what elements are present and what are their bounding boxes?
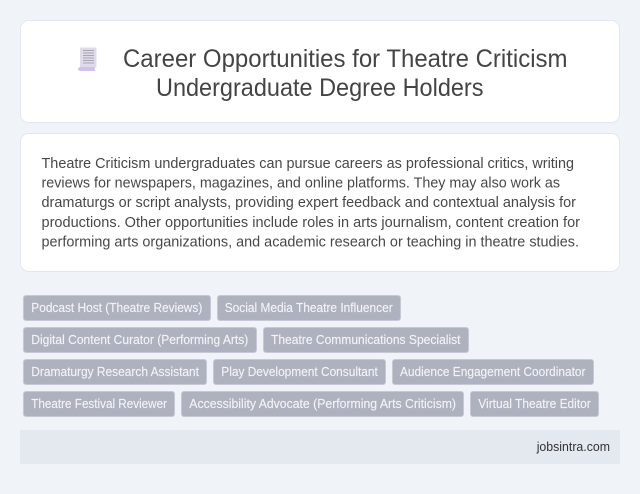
tag: Social Media Theatre Influencer	[218, 296, 400, 320]
panel: title header	[20, 20, 620, 122]
tag: Digital Content Curator: Digital Content Curator (Performing Arts)	[31, 333, 248, 347]
tag: Play Development Consultant	[214, 360, 386, 384]
description text	[42, 156, 580, 250]
tags: career roles	[24, 296, 598, 416]
tag: Podcast Host: Podcast Host (Theatre Reviews)	[31, 301, 202, 315]
tag: Accessibility Advocate	[182, 392, 464, 416]
footer source text: jobsintra.com	[536, 440, 610, 454]
description text: dramaturgs or script analysts, providing expert feedback and contextual analysis for	[42, 195, 576, 211]
tag: Theatre Festival Reviewer: Theatre Festival Reviewer	[31, 397, 167, 411]
description text: Theatre Criticism undergraduates can pursue careers as professional critics, writing	[42, 156, 574, 172]
footer bar	[20, 430, 620, 464]
tag: Play Development Consultant: Play Development Consultant	[221, 365, 378, 379]
tag: Social Media Theatre Influencer: Social Media Theatre Influencer	[225, 301, 393, 315]
panel: description	[20, 134, 620, 272]
icon: document scroll	[78, 48, 96, 71]
tag: Digital Content Curator	[24, 328, 256, 352]
title text: Undergraduate Degree Holders	[156, 74, 484, 102]
tag: Virtual Theatre Editor	[470, 392, 598, 416]
tag: Audience Engagement Coordinator	[392, 360, 594, 384]
title text: Career Opportunities for Theatre Criticism	[123, 45, 568, 73]
tag: Theatre Communications Specialist: Theatre Communications Specialist	[271, 333, 461, 347]
description text: productions. Other opportunities include roles in arts journalism, content creation for	[42, 215, 580, 231]
description text: reviews for newspapers, magazines, and online platforms. They may also work as	[42, 176, 560, 192]
tag: Audience Engagement Coordinator: Audience Engagement Coordinator	[400, 365, 586, 379]
tag: Theatre Festival Reviewer	[24, 392, 174, 416]
tag: Accessibility Advocate: Accessibility Advocate (Performing Arts Criticism)	[189, 397, 456, 411]
title text	[123, 45, 568, 102]
tag: Theatre Communications Specialist	[264, 328, 468, 352]
tag: Dramaturgy Research Assistant	[24, 360, 206, 384]
tag: Dramaturgy Research Assistant: Dramaturgy Research Assistant	[31, 365, 200, 379]
tag: Virtual Theatre Editor: Virtual Theatre Editor	[478, 397, 591, 411]
description text: performing arts organizations, and academic research or teaching in theatre studies.	[42, 234, 579, 250]
tag: Podcast Host	[24, 296, 210, 320]
